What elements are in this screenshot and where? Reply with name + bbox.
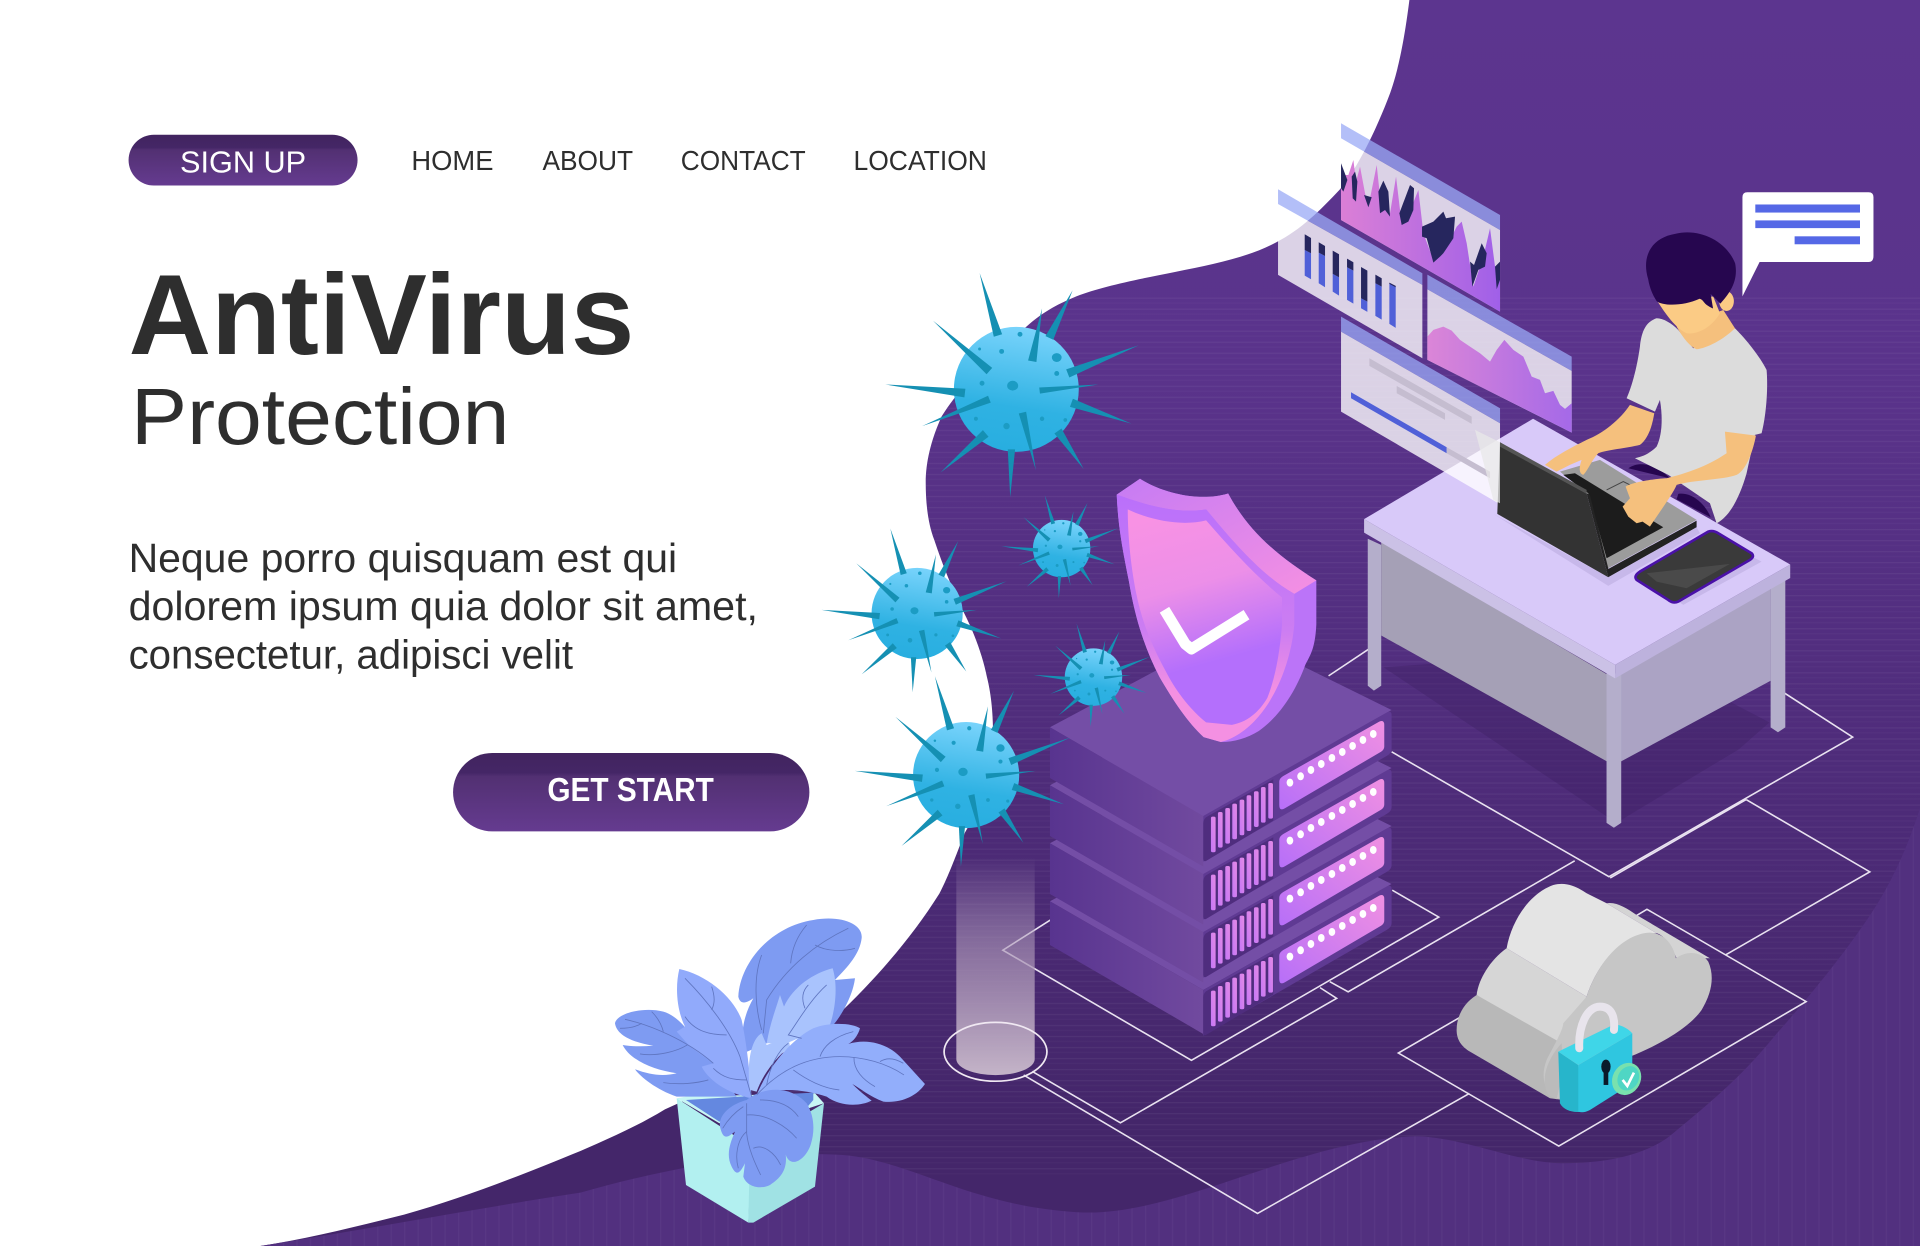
sign up button: [129, 135, 358, 186]
cloud: [1457, 884, 1712, 1100]
virus: small upper: [1001, 495, 1118, 598]
desk: [1364, 419, 1790, 828]
data panels: [1278, 123, 1572, 504]
server stack: [1050, 631, 1392, 1036]
laptop front edge: [1607, 521, 1697, 577]
navigation: ABOUT: [542, 145, 633, 176]
subtitle: Protection: [131, 372, 509, 461]
navigation: LOCATION: [853, 145, 987, 176]
leaves: [615, 919, 925, 1187]
laptop base: [1560, 460, 1697, 568]
floor shadow under desk: [1384, 649, 1769, 823]
pot: [677, 1093, 824, 1223]
right arm: [1623, 432, 1756, 527]
description: [129, 535, 758, 678]
person and laptop: [1475, 297, 1767, 605]
trousers: [1628, 464, 1711, 517]
ear: [1719, 291, 1734, 311]
laptop screen: [1497, 442, 1608, 577]
speech bubble: [1742, 192, 1873, 296]
panel: spiky chart: [1341, 123, 1500, 312]
navigation: [411, 145, 987, 176]
virus: left: [821, 529, 1007, 692]
get start button: [453, 753, 809, 831]
virus: small lower: [1033, 624, 1150, 727]
cloud with padlock: [1457, 884, 1712, 1112]
holographic pane: [1475, 430, 1500, 503]
left arm: [1545, 405, 1654, 475]
panel: text report: [1341, 317, 1500, 504]
check mark: [1164, 610, 1247, 649]
description: dolorem ipsum quia dolor sit amet,: [129, 583, 758, 629]
verified badge: [1606, 1058, 1647, 1100]
get start button: GET START: [547, 772, 714, 809]
glass cylinder: [944, 857, 1047, 1081]
navigation: CONTACT: [681, 145, 806, 176]
cylinder base ring: [944, 1022, 1047, 1081]
sign up button: SIGN UP: [180, 146, 306, 180]
shirt: [1627, 318, 1767, 523]
desk front panels: [1381, 541, 1614, 765]
face: [1657, 297, 1720, 333]
hair: [1646, 232, 1736, 309]
shield: [1117, 479, 1316, 742]
floor outlines: [1003, 649, 1870, 1213]
neck: [1677, 310, 1735, 349]
leaf veins: [620, 925, 904, 1175]
shield front face: [1128, 509, 1282, 725]
plant: [615, 919, 925, 1223]
description: consectetur, adipisci velit: [129, 632, 573, 678]
desk legs back: [1368, 539, 1381, 691]
background: lighter wave at bottom: [257, 808, 1920, 1246]
virus: large: [885, 273, 1139, 497]
navigation: HOME: [411, 145, 493, 176]
desk shadow of laptop: [1493, 514, 1700, 586]
trackpad: [1607, 482, 1643, 492]
desk top: [1364, 419, 1790, 665]
virus: bottom: [855, 676, 1070, 867]
title: AntiVirus: [129, 252, 634, 379]
tablet: [1636, 531, 1762, 605]
keyboard: [1563, 473, 1663, 558]
panel: area chart: [1427, 275, 1572, 433]
panel: bar chart: [1278, 189, 1422, 358]
padlock: [1558, 1007, 1647, 1112]
shield rim: [1117, 495, 1294, 742]
description: Neque porro quisquam est qui: [129, 535, 677, 581]
